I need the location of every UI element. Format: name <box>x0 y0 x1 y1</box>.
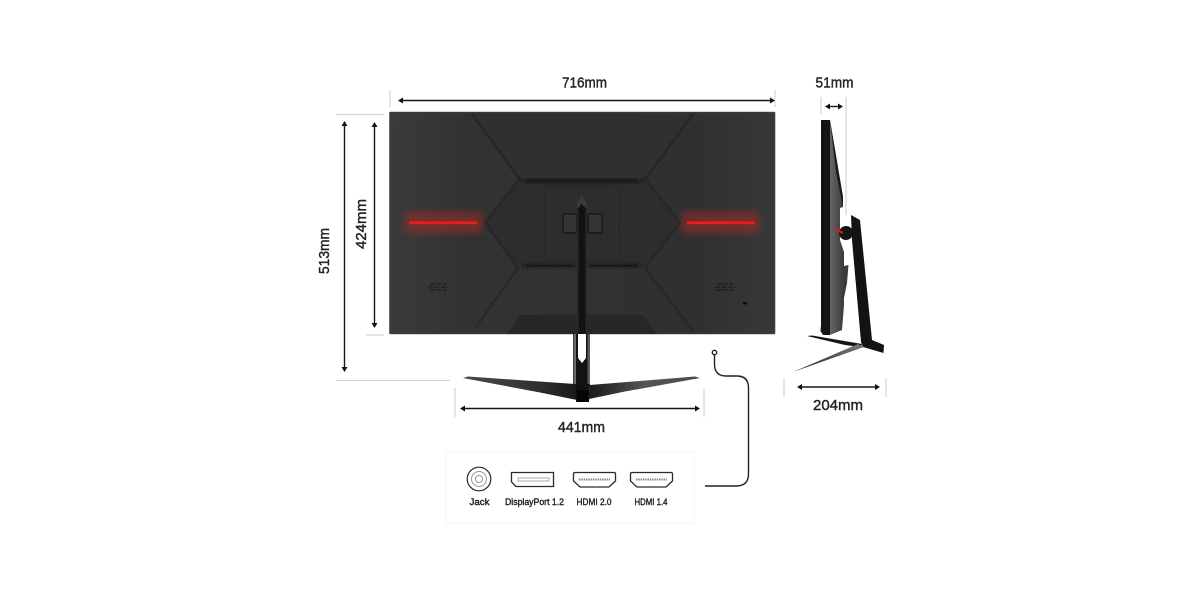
port labels: HDMI 2.0 <box>576 497 612 508</box>
port labels <box>470 497 668 508</box>
side stand long foot <box>793 344 864 372</box>
icon: DisplayPort <box>512 472 554 486</box>
red light bar left <box>405 212 482 233</box>
depth arrow 51mm <box>825 104 843 110</box>
label 513mm: 513mm <box>316 228 333 274</box>
stand mount knobs <box>563 214 602 233</box>
width arrow 441mm <box>460 406 700 412</box>
callout connector line <box>705 350 748 486</box>
label 51mm: 51mm <box>816 74 854 92</box>
side stand rear foot <box>807 336 862 347</box>
icon: jack <box>467 467 491 491</box>
base arrow 204mm <box>797 384 880 390</box>
VESA mounting plate <box>545 186 619 260</box>
rear hexagon panel <box>472 113 693 334</box>
power button <box>743 302 747 304</box>
speaker grille right <box>715 284 736 290</box>
bottom vent strip <box>522 262 642 269</box>
speaker grille left <box>428 284 448 290</box>
label 424mm: 424mm <box>353 199 370 249</box>
monitor rear view <box>390 112 775 334</box>
label 716mm: 716mm <box>562 74 607 92</box>
red light bar right <box>682 212 759 233</box>
port labels: DisplayPort 1.2 <box>505 497 564 508</box>
monitor side view <box>793 120 884 372</box>
icon: HDMI 2.0 <box>574 472 616 487</box>
height arrow 513mm <box>342 121 348 372</box>
stand neck <box>573 195 590 402</box>
width arrow 716mm <box>398 98 775 104</box>
icon: HDMI 1.4 <box>630 472 672 487</box>
panel: ports <box>446 452 694 523</box>
label 204mm: 204mm <box>813 397 863 414</box>
side stand neck <box>851 215 884 353</box>
port labels: HDMI 1.4 <box>634 497 668 508</box>
stand front view <box>463 195 700 402</box>
stand feet <box>463 376 700 402</box>
label 441mm: 441mm <box>558 419 605 436</box>
port labels: Jack <box>470 497 490 508</box>
height arrow 424mm <box>372 122 378 328</box>
reference lines <box>336 90 886 417</box>
